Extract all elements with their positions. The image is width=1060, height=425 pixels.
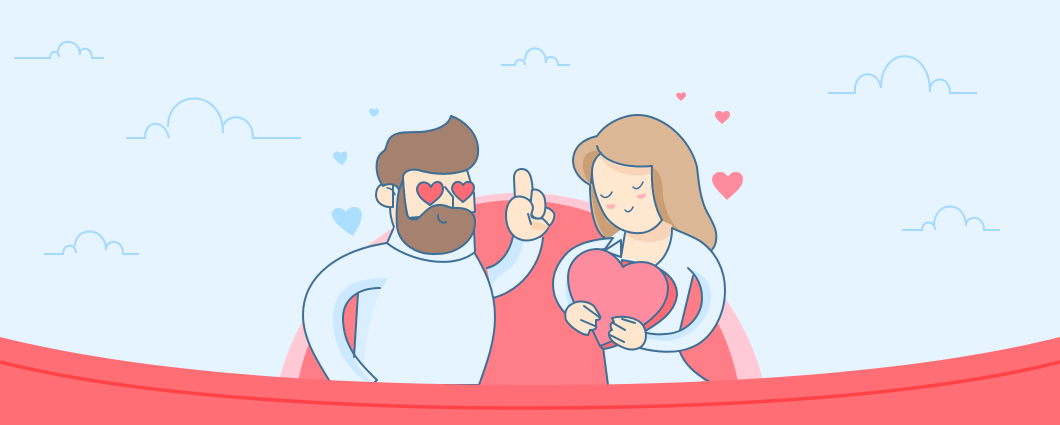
neck side (390, 190, 400, 235)
beard (397, 180, 475, 254)
raised arm (487, 236, 543, 298)
left collar (604, 240, 621, 257)
woman (553, 115, 725, 385)
back heart (600, 260, 677, 349)
pink hearts (676, 92, 743, 200)
right heart eye (452, 182, 474, 202)
torso (600, 228, 710, 385)
mouth (625, 207, 633, 212)
hair shade (652, 167, 682, 232)
collar (387, 225, 475, 262)
torso (303, 243, 495, 385)
right hand (609, 317, 646, 350)
ear (376, 183, 393, 207)
nose (445, 187, 453, 207)
inner arm (333, 278, 387, 384)
left hand (565, 302, 600, 335)
ground (0, 337, 1060, 425)
neck (621, 225, 672, 265)
back hair (573, 115, 716, 252)
right arm (640, 228, 725, 352)
blue hearts (332, 109, 379, 236)
sun (275, 193, 767, 400)
eyes (601, 182, 643, 197)
man (303, 116, 554, 385)
face (403, 170, 475, 218)
blush (606, 193, 646, 209)
clouds (14, 42, 1000, 254)
ground line (0, 362, 1060, 408)
big heart (568, 249, 668, 346)
smile (438, 215, 446, 223)
hand pointing (506, 169, 554, 240)
face (592, 146, 662, 233)
left heart eye (417, 182, 443, 205)
left arm (553, 238, 613, 314)
hair (377, 116, 478, 205)
